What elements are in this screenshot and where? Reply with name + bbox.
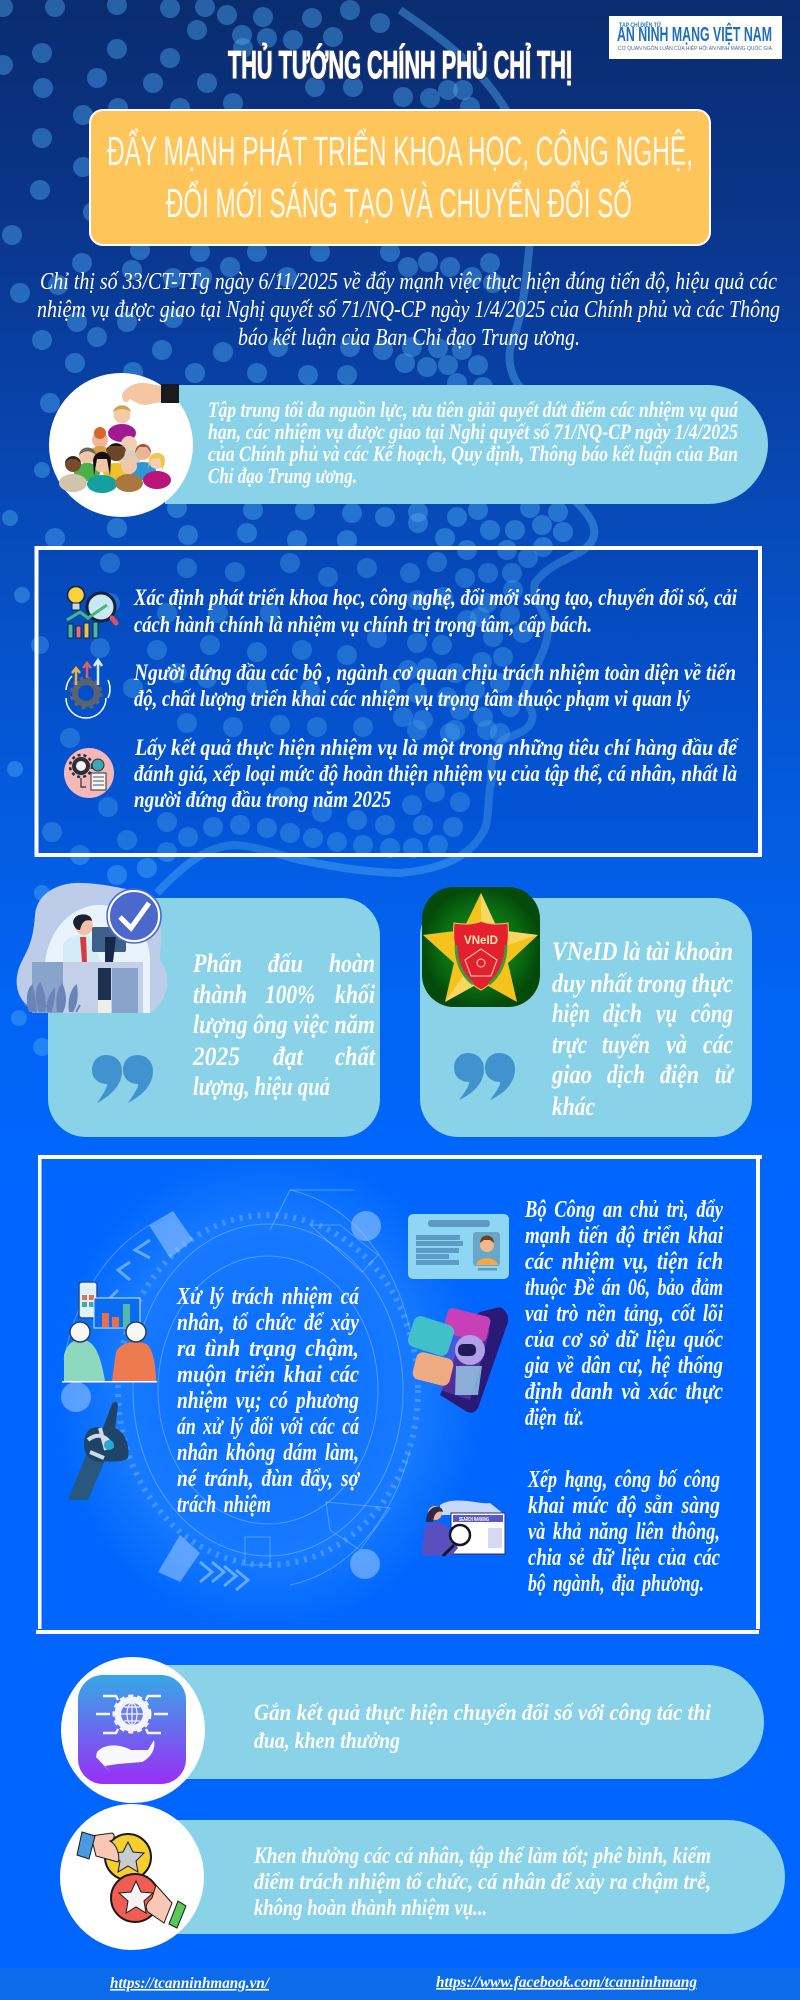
text: right block bottom — [527, 1467, 720, 1597]
card text: tử — [715, 1060, 735, 1089]
card text: khác — [552, 1092, 595, 1121]
card text: khối — [335, 980, 376, 1009]
icon: ID card — [408, 1214, 509, 1279]
background pattern: dots and curve — [0, 0, 594, 1056]
text: right block top — [524, 1197, 723, 1431]
card text: và — [666, 1030, 687, 1059]
text: right block bottom: Xếp hạng, công bố công — [527, 1467, 720, 1493]
text: right block top: Bộ Công an chủ trì, đẩy — [524, 1197, 723, 1223]
logo: CƠ QUAN NGÔN LUẬN CỦA HIỆP HỘI AN NINH MẠNG QUỐC GIA — [618, 44, 772, 52]
icon: globe gear in hand — [61, 1657, 205, 1803]
icon: VNeID badge: VNeID — [464, 933, 498, 947]
card text — [551, 937, 735, 1121]
frame — [36, 548, 760, 855]
card text: đạt — [273, 1042, 304, 1071]
text: left block: Xử lý trách nhiệm cá — [176, 1284, 360, 1310]
text: left block: ra tình trạng chậm, — [177, 1336, 359, 1362]
card text: duy nhất trong thực — [552, 969, 733, 998]
card text: VNeID là tài khoản — [552, 937, 733, 966]
panel: digital transformation pill — [61, 1657, 764, 1803]
card text: tuyến — [602, 1030, 650, 1059]
pill text: đua, khen thưởng — [254, 1728, 400, 1753]
frame — [36, 1155, 762, 1634]
text: right block bottom: và khả năng liên thông, — [528, 1519, 720, 1545]
text: right block top: vai trò nền tảng, cốt lõi — [525, 1301, 723, 1327]
pill text: Gắn kết quả thực hiện chuyển đổi số với công tác thi — [254, 1700, 712, 1725]
logo: TẠP CHÍ ĐIỆN TỬ — [619, 20, 661, 29]
text: point 2 — [133, 660, 736, 711]
icon: process on pink circle — [64, 748, 114, 798]
icon: VNeID badge — [422, 887, 540, 1007]
card text: công — [691, 999, 733, 1028]
card: 100% workload — [17, 883, 380, 1137]
pill background — [165, 385, 768, 504]
card text: chất — [335, 1042, 376, 1071]
logo — [609, 16, 782, 59]
icon: quote mark — [454, 1053, 515, 1100]
pill background — [150, 1665, 764, 1779]
text: right block top: mạnh tiến độ triển khai — [525, 1223, 723, 1249]
text: point 3 — [134, 735, 739, 812]
text: right block top: của cơ sở dữ liệu quốc — [525, 1327, 723, 1353]
decorative hud rings — [53, 1150, 483, 1630]
text: right block bottom: chia sẻ dữ liệu của các — [528, 1545, 720, 1571]
text: point 2: độ, chất lượng triển khai các nhiệm vụ trọng tâm thuộc phạm vi quan lý — [134, 686, 691, 711]
text: point 1: cách hành chính là nhiệm vụ chính trị trọng tâm, cấp bách. — [134, 612, 592, 637]
pill text — [253, 1843, 711, 1920]
text: point 3: người đứng đầu trong năm 2025 — [134, 787, 391, 812]
card text: hiện — [552, 999, 590, 1028]
icon: star coins and hands — [60, 1804, 204, 1950]
card background — [48, 898, 380, 1137]
card text: trực — [552, 1030, 587, 1059]
icon: woman with magnifier: SEARCH RANKING — [459, 1517, 489, 1523]
icon: bulb and chart — [67, 586, 116, 638]
panel: focus resources pill — [49, 373, 768, 517]
card text: đấu — [268, 949, 303, 978]
pill text — [254, 1700, 712, 1753]
text: right block top: định danh và xác thực — [525, 1379, 723, 1405]
text: right block top: thuộc Đề án 06, bảo đảm — [525, 1275, 723, 1301]
pill background — [150, 1820, 785, 1934]
card text: Phấn — [192, 949, 242, 978]
intro text: báo kết luận của Ban Chỉ đạo Trung ương. — [238, 325, 580, 351]
card text: hoàn — [329, 949, 375, 978]
text: left block — [176, 1284, 361, 1518]
text: right block top: gia về dân cư, hệ thống — [524, 1353, 723, 1379]
facebook link: https://www.facebook.com/tcanninhmang — [436, 1974, 697, 1991]
text: right block bottom: khai mức độ sẵn sàng — [528, 1493, 720, 1519]
icon: woman with magnifier — [422, 1500, 505, 1556]
card text: giao — [551, 1060, 592, 1089]
icon: robot hand — [68, 1402, 128, 1500]
pill text: điểm trách nhiệm tổ chức, cá nhân để xảy ra chậm trễ, — [254, 1869, 711, 1894]
text: left block: trách nhiệm — [177, 1492, 271, 1518]
card text: dịch — [607, 1060, 645, 1089]
icon: chatbot phone — [406, 1307, 508, 1413]
card text: điện — [660, 1060, 699, 1089]
card text: dịch — [603, 999, 642, 1028]
text: left block: nhân không dám làm, — [177, 1440, 359, 1466]
card text: các — [703, 1030, 733, 1059]
card text: lượng, hiệu quả — [193, 1072, 330, 1101]
card background — [420, 898, 752, 1137]
card text: lượng ông việc năm — [193, 1010, 375, 1039]
icon: people and hand — [49, 373, 193, 517]
pill text: Khen thưởng các cá nhân, tập thể làm tốt; phê bình, kiểm — [253, 1843, 711, 1868]
panel: reward and discipline pill — [60, 1804, 785, 1950]
card text: 100% — [265, 980, 315, 1009]
headline banner — [90, 110, 710, 245]
text: point 1 — [133, 585, 737, 637]
card text: thành — [193, 980, 247, 1009]
text: right block bottom: bộ ngành, địa phương. — [528, 1571, 704, 1597]
icon: gear with arrows — [66, 660, 110, 718]
icon: man at desk with check — [17, 883, 167, 1013]
pill text — [208, 397, 739, 488]
text: left block: nhân, tổ chức để xảy — [177, 1310, 359, 1336]
footer — [0, 1968, 800, 2000]
card text: 2025 — [192, 1042, 240, 1071]
icon: people with chart — [62, 1282, 157, 1382]
icon: quote mark — [92, 1055, 153, 1103]
website link: https://tcanninhmang.vn/ — [110, 1975, 270, 1992]
text: left block: nhiệm vụ; có phương — [177, 1388, 359, 1414]
pill text: không hoàn thành nhiệm vụ... — [254, 1895, 487, 1920]
card: VNeID — [420, 887, 752, 1137]
text: left block: né tránh, đùn đẩy, sợ — [177, 1466, 361, 1492]
text: right block top: các nhiệm vụ, tiện ích — [525, 1249, 723, 1275]
text: left block: án xử lý đối với các cá — [177, 1414, 360, 1440]
card text: vụ — [656, 999, 677, 1028]
panel: responsibilities box — [36, 1150, 762, 1634]
text: left block: muộn triển khai các — [177, 1362, 359, 1388]
card text — [192, 949, 376, 1101]
panel: key tasks box — [36, 548, 760, 855]
text: right block top: điện tử. — [525, 1405, 584, 1431]
pill text: Chỉ đạo Trung ương. — [208, 463, 357, 488]
intro text — [37, 269, 780, 351]
